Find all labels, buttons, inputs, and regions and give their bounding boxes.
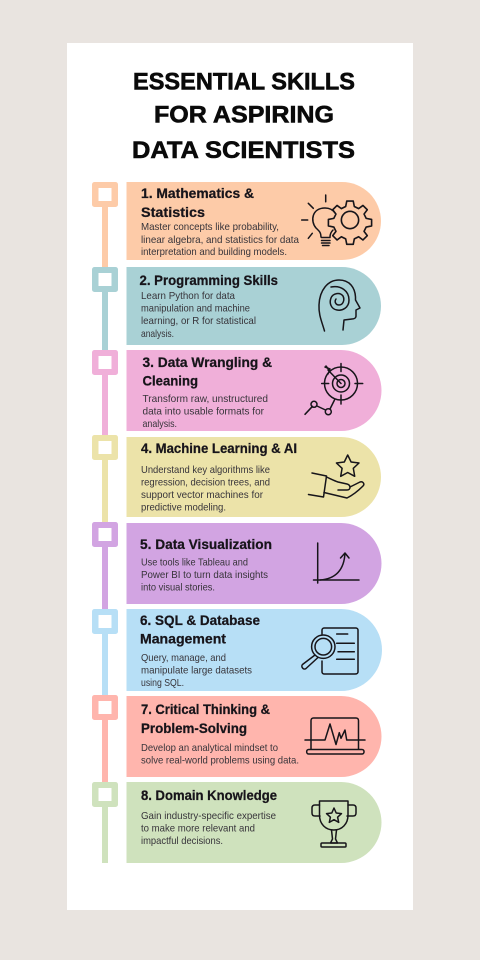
text: critical thinking description (141, 742, 299, 766)
text: sql description: using SQL. (141, 677, 184, 689)
text: programming description: analysis. (141, 328, 174, 340)
panel: critical thinking and problem solving (126, 696, 382, 777)
heading: critical thinking: 7. Critical Thinking & (141, 701, 270, 717)
heading: critical thinking: Problem-Solving (141, 720, 247, 736)
text: domain description: to make more relevant and (141, 822, 255, 834)
panel: mathematics and statistics (126, 182, 381, 260)
panel: sql and database management (126, 609, 382, 691)
text: wrangling description (142, 393, 268, 430)
timeline (92, 182, 118, 863)
text: critical thinking description: solve real-world problems using data. (141, 754, 299, 766)
text: visualization description: into visual stories. (141, 582, 215, 594)
panel: domain knowledge (126, 782, 382, 863)
panel: programming skills (126, 267, 381, 345)
icon: growth curve chart (314, 543, 359, 583)
text: programming description: learning, or R for statistical (141, 315, 256, 327)
panel: data wrangling and cleaning (126, 350, 382, 431)
heading: mathematics: Statistics (141, 204, 205, 220)
text: programming description: manipulation and machine (141, 302, 250, 314)
heading: data wrangling (142, 354, 272, 388)
heading: sql: 6. SQL & Database (140, 612, 260, 628)
text: machine learning description: Understand key algorithms like (141, 464, 270, 476)
title: ESSENTIAL SKILLS (133, 68, 355, 96)
icon: head with spiral (319, 280, 360, 331)
title (132, 68, 355, 164)
heading: programming skills: 2. Programming Skills (140, 272, 278, 288)
panel: data visualization (126, 523, 382, 604)
title: DATA SCIENTISTS (132, 137, 355, 164)
text: machine learning description: support vector machines for (141, 489, 263, 501)
icon: hand holding star (308, 455, 364, 498)
heading: sql (140, 612, 260, 646)
heading: mathematics: 1. Mathematics & (141, 185, 254, 201)
text: sql description (141, 652, 252, 689)
text: mathematics description: linear algebra, and statistics for data (141, 234, 299, 246)
icon: target and line graph (305, 364, 363, 415)
text: sql description: manipulate large datasets (141, 664, 252, 676)
text: programming description (141, 290, 256, 340)
text: visualization description: Use tools like Tableau and (141, 556, 248, 568)
text: machine learning description: predictive modeling. (141, 502, 226, 514)
text: wrangling description: analysis. (142, 418, 177, 430)
text: domain description (141, 810, 276, 847)
text: visualization description (141, 556, 268, 594)
white page panel (67, 43, 413, 910)
heading: data visualization: 5. Data Visualization (140, 536, 272, 552)
text: wrangling description: data into usable formats for (142, 406, 264, 418)
icon: laptop with pulse line (305, 718, 365, 754)
heading: critical thinking (141, 701, 270, 736)
text: visualization description: Power BI to turn data insights (141, 569, 268, 581)
text: machine learning description: regression, decision trees, and (141, 476, 270, 488)
text: sql description: Query, manage, and (141, 652, 226, 664)
heading: data wrangling: Cleaning (142, 372, 198, 388)
text: wrangling description: Transform raw, unstructured (142, 393, 268, 405)
heading: machine learning: 4. Machine Learning & AI (141, 440, 297, 456)
icon: trophy with star (312, 801, 356, 847)
text: mathematics description: Master concepts like probability, (141, 221, 279, 233)
heading: mathematics (141, 185, 254, 220)
text: domain description: impactful decisions. (141, 835, 223, 847)
heading: sql: Management (140, 630, 226, 646)
text: mathematics description: interpretation and building models. (141, 246, 287, 258)
text: critical thinking description: Develop an analytical mindset to (141, 742, 278, 754)
panel: machine learning and ai (126, 437, 381, 517)
title: FOR ASPIRING (154, 102, 334, 128)
text: domain description: Gain industry-specific expertise (141, 810, 276, 822)
text: programming description: Learn Python for data (141, 290, 235, 302)
icon: magnifier over document (302, 628, 358, 674)
heading: domain knowledge: 8. Domain Knowledge (141, 787, 277, 803)
heading: data wrangling: 3. Data Wrangling & (142, 354, 272, 370)
text: machine learning description (141, 464, 270, 514)
text: mathematics description (141, 221, 299, 258)
icon: light bulb and gear (302, 195, 372, 246)
